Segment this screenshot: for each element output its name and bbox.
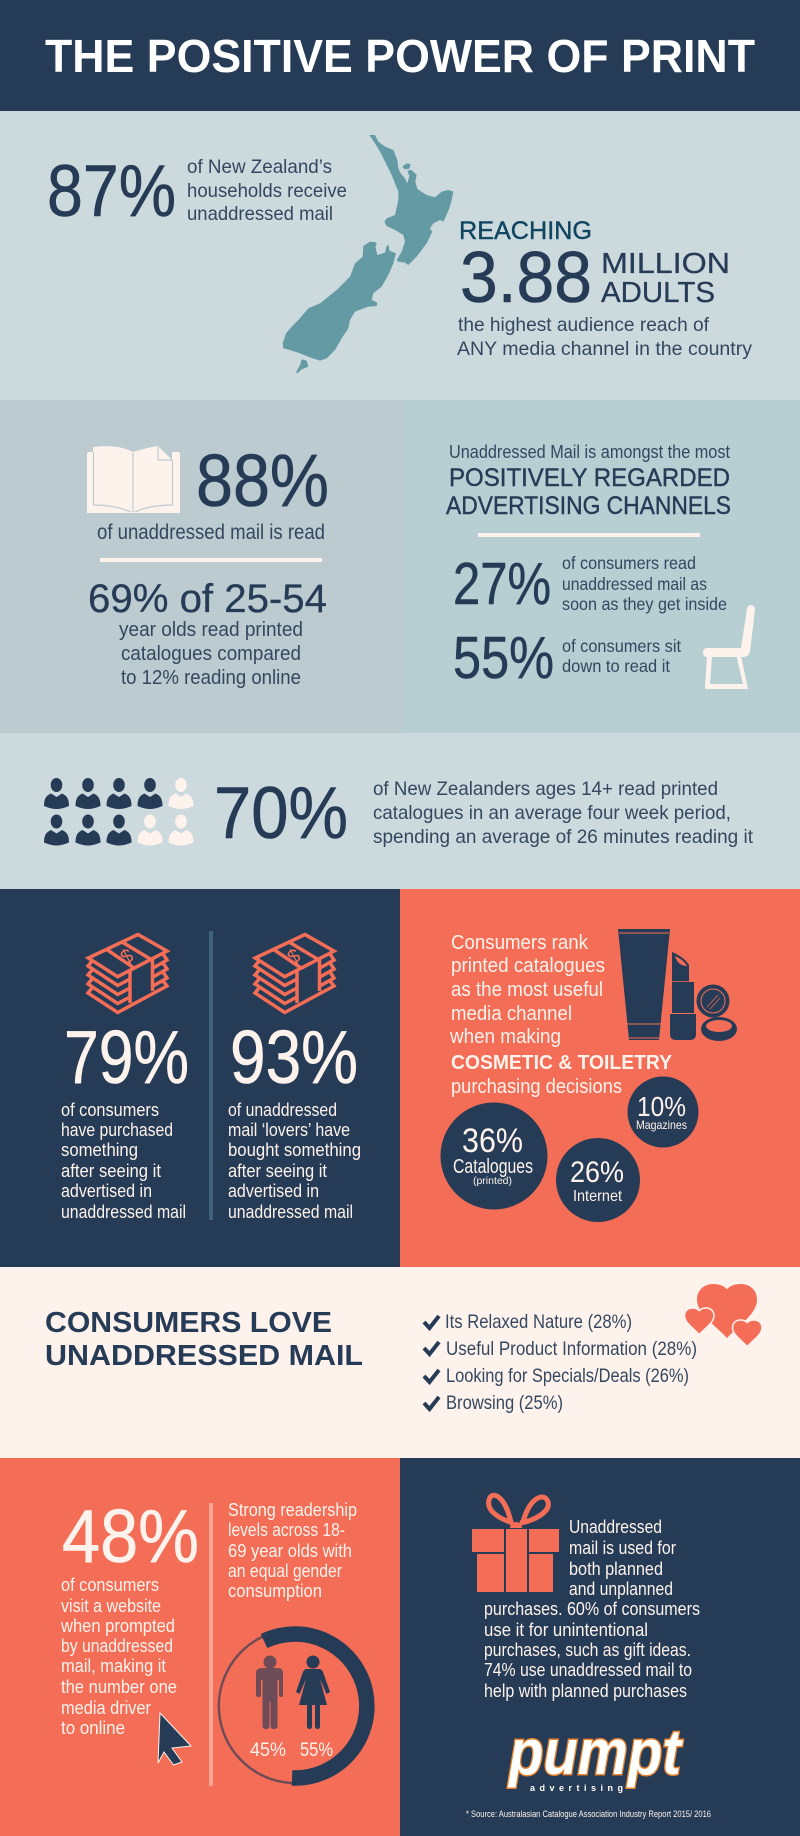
label: 45%: 45% [250, 1740, 286, 1761]
text: visit a website [60, 1575, 177, 1738]
panel: read rate [0, 400, 403, 733]
text: lovers bought: unaddressed mail [228, 1202, 353, 1222]
text: lovers bought: bought something [228, 1140, 361, 1160]
heading: positively regarded: POSITIVELY REGARDED [449, 464, 730, 492]
text: New Zealanders: of New Zealanders ages 14+ read printed [373, 778, 718, 800]
text: planned and unplanned: 74% use unaddressed mail to [484, 1659, 692, 1680]
panel: website and readership [0, 1458, 400, 1836]
map: New Zealand [283, 135, 453, 373]
text: households: households receive [187, 180, 347, 202]
text: consumers purchased [61, 1100, 186, 1222]
text: strong readership [228, 1500, 357, 1601]
text: catalogues [119, 618, 303, 689]
checklist: Its Relaxed Nature (28%) [445, 1311, 632, 1333]
circle: catalogues 36% [440, 1102, 548, 1210]
circle: catalogues 36%: Catalogues [453, 1156, 533, 1178]
checklist: Useful Product Information (28%) [446, 1338, 697, 1360]
text: read inside: of consumers read [562, 553, 696, 573]
panel: positively regarded [403, 400, 800, 733]
circle: internet 26%: Internet [573, 1188, 622, 1205]
text: planned and unplanned: use it for unintentional [484, 1619, 648, 1640]
text: visit a website: media driver [61, 1698, 151, 1718]
icon: dollar sign: $ [117, 945, 137, 969]
text: planned and unplanned: Unaddressed [569, 1516, 662, 1537]
text: lovers bought: after seeing it [228, 1161, 327, 1181]
heading: consumers love [45, 1307, 363, 1372]
text: sit down: down to read it [562, 656, 670, 676]
text: strong readership: Strong readership [228, 1500, 357, 1520]
text: New Zealanders: spending an average of 26 minutes reading it [373, 826, 754, 848]
text: catalogues: year olds read printed [119, 618, 303, 641]
heading: consumers love: CONSUMERS LOVE [45, 1307, 332, 1339]
heading: consumers love: UNADDRESSED MAIL [45, 1340, 363, 1372]
panel: planned purchases [400, 1458, 800, 1836]
icon: money stack left [88, 934, 167, 1012]
stat: 3.88: 3.88 [460, 238, 592, 318]
icon: man [256, 1656, 283, 1729]
checklist: Browsing (25%) [446, 1392, 563, 1414]
text: planned and unplanned: purchases, such as gift ideas. [484, 1639, 691, 1660]
logo: pumpt advertising: advertising [530, 1783, 623, 1793]
stat: 79%: 79% [64, 1015, 189, 1099]
icon: woman [296, 1656, 330, 1729]
text: consumers purchased: after seeing it [61, 1161, 161, 1181]
text: catalogues: catalogues compared [121, 642, 301, 665]
stat: 69% of 25-54: 69% of 25-54 [88, 577, 327, 621]
text: New Zealanders [373, 778, 754, 848]
text: lovers bought: advertised in [228, 1181, 319, 1201]
text: visit a website: by unaddressed [61, 1636, 173, 1656]
label: million adults [601, 248, 730, 309]
panel: consumers love [0, 1267, 800, 1458]
text: audience reach: the highest audience reach of [458, 314, 710, 336]
heading: reaching: REACHING [459, 217, 592, 245]
text: catalogues: to 12% reading online [121, 666, 301, 689]
icon: chair [703, 605, 755, 689]
text: visit a website: of consumers [61, 1575, 159, 1595]
text: consumers purchased: something [61, 1140, 138, 1160]
source note: * Source: Australasian Catalogue Association Industry Report 2015/ 2016 [466, 1809, 711, 1819]
text: consumers rank: printed catalogues [451, 954, 605, 977]
text: read inside [562, 553, 727, 614]
chart: gender ring [219, 1634, 367, 1783]
text: strong readership: levels across 18- [228, 1520, 345, 1540]
text: consumers rank [449, 931, 672, 1098]
icon: money stack right [255, 934, 334, 1012]
header band [0, 0, 800, 111]
icon: hearts [684, 1284, 762, 1347]
text: read inside: soon as they get inside [562, 594, 727, 614]
circle: magazines 10%: 10% [637, 1091, 686, 1122]
text: strong readership: 69 year olds with [228, 1541, 352, 1561]
text: consumers purchased: unaddressed mail [61, 1202, 186, 1222]
checklist: Looking for Specials/Deals (26%) [446, 1365, 689, 1387]
icon: gift [472, 1495, 559, 1592]
text: consumers rank: media channel [451, 1002, 572, 1025]
text: New Zealanders: catalogues in an average four week period, [373, 802, 731, 824]
text: sit down [562, 636, 681, 676]
text: households [187, 156, 347, 225]
label: million adults: ADULTS [601, 277, 715, 309]
text: visit a website: the number one [61, 1677, 177, 1697]
text: consumers rank: as the most useful [451, 978, 603, 1001]
label: million adults: MILLION [601, 248, 730, 280]
circle: magazines 10% [628, 1076, 698, 1148]
text: consumers rank: Consumers rank [451, 931, 589, 954]
text: intro: Unaddressed Mail is amongst the most [449, 441, 730, 462]
title: THE POSITIVE POWER OF PRINT [45, 30, 755, 82]
text: consumers rank: COSMETIC & TOILETRY [451, 1051, 672, 1074]
stat: 93%: 93% [230, 1015, 358, 1099]
text: strong readership: consumption [228, 1581, 322, 1601]
text: consumers purchased: have purchased [61, 1120, 173, 1140]
icon: cosmetics [618, 929, 737, 1041]
heading: positively regarded: ADVERTISING CHANNELS [446, 492, 731, 520]
text: consumers rank: purchasing decisions [451, 1075, 622, 1098]
text: visit a website: to online [61, 1718, 125, 1738]
text: planned and unplanned: and unplanned [569, 1578, 673, 1599]
text: households: unaddressed mail [187, 203, 333, 225]
panel: 70% readers [0, 733, 800, 889]
logo: pumpt advertising: pumpt [507, 1716, 683, 1788]
text: strong readership: an equal gender [228, 1561, 342, 1581]
text: lovers bought [228, 1100, 361, 1222]
stat: 48%: 48% [62, 1494, 199, 1578]
text: lovers bought: of unaddressed [228, 1100, 337, 1120]
icon: open book [87, 446, 180, 513]
icon: dollar sign: $ [284, 945, 304, 969]
text: households: of New Zealand’s [187, 156, 332, 178]
text: planned and unplanned: both planned [569, 1558, 663, 1579]
text: lovers bought: mail ‘lovers’ have [228, 1120, 350, 1140]
text: visit a website: mail, making it [61, 1656, 166, 1676]
text: consumers purchased: advertised in [61, 1181, 152, 1201]
text: visit a website: when prompted [60, 1616, 175, 1636]
circle: catalogues 36%: 36% [462, 1122, 523, 1160]
label: 55%: 55% [300, 1740, 333, 1761]
icon: cursor arrow [158, 1713, 191, 1765]
checklist [424, 1311, 697, 1414]
text: mail is read: of unaddressed mail is read [97, 521, 325, 544]
text: planned and unplanned: help with planned purchases [484, 1680, 687, 1701]
text: sit down: of consumers sit [562, 636, 681, 656]
stat: 55%: 55% [453, 625, 554, 691]
panel: reach [0, 111, 800, 400]
heading: positively regarded [446, 464, 731, 520]
text: planned and unplanned: mail is used for [569, 1537, 676, 1558]
circle: catalogues 36%: (printed) [473, 1175, 512, 1187]
stat: 27%: 27% [453, 551, 551, 617]
text: read inside: unaddressed mail as [562, 574, 707, 594]
text: consumers rank: when making [449, 1025, 561, 1048]
panel: cosmetics [400, 889, 800, 1267]
text: planned and unplanned: purchases. 60% of consumers [484, 1598, 700, 1619]
text: audience reach: ANY media channel in the country [457, 338, 752, 360]
stat: 70%: 70% [214, 773, 348, 854]
text: audience reach [457, 314, 752, 360]
icon: people grid [44, 778, 194, 846]
text: planned and unplanned [484, 1516, 700, 1701]
panel: purchases [0, 889, 400, 1267]
circle: internet 26%: 26% [570, 1156, 624, 1189]
circle: magazines 10%: Magazines [636, 1118, 687, 1132]
circle: internet 26% [556, 1138, 640, 1222]
stat: 88%: 88% [196, 439, 329, 522]
stat: 87%: 87% [47, 151, 176, 232]
text: visit a website: visit a website [61, 1596, 161, 1616]
text: consumers purchased: of consumers [61, 1100, 159, 1120]
